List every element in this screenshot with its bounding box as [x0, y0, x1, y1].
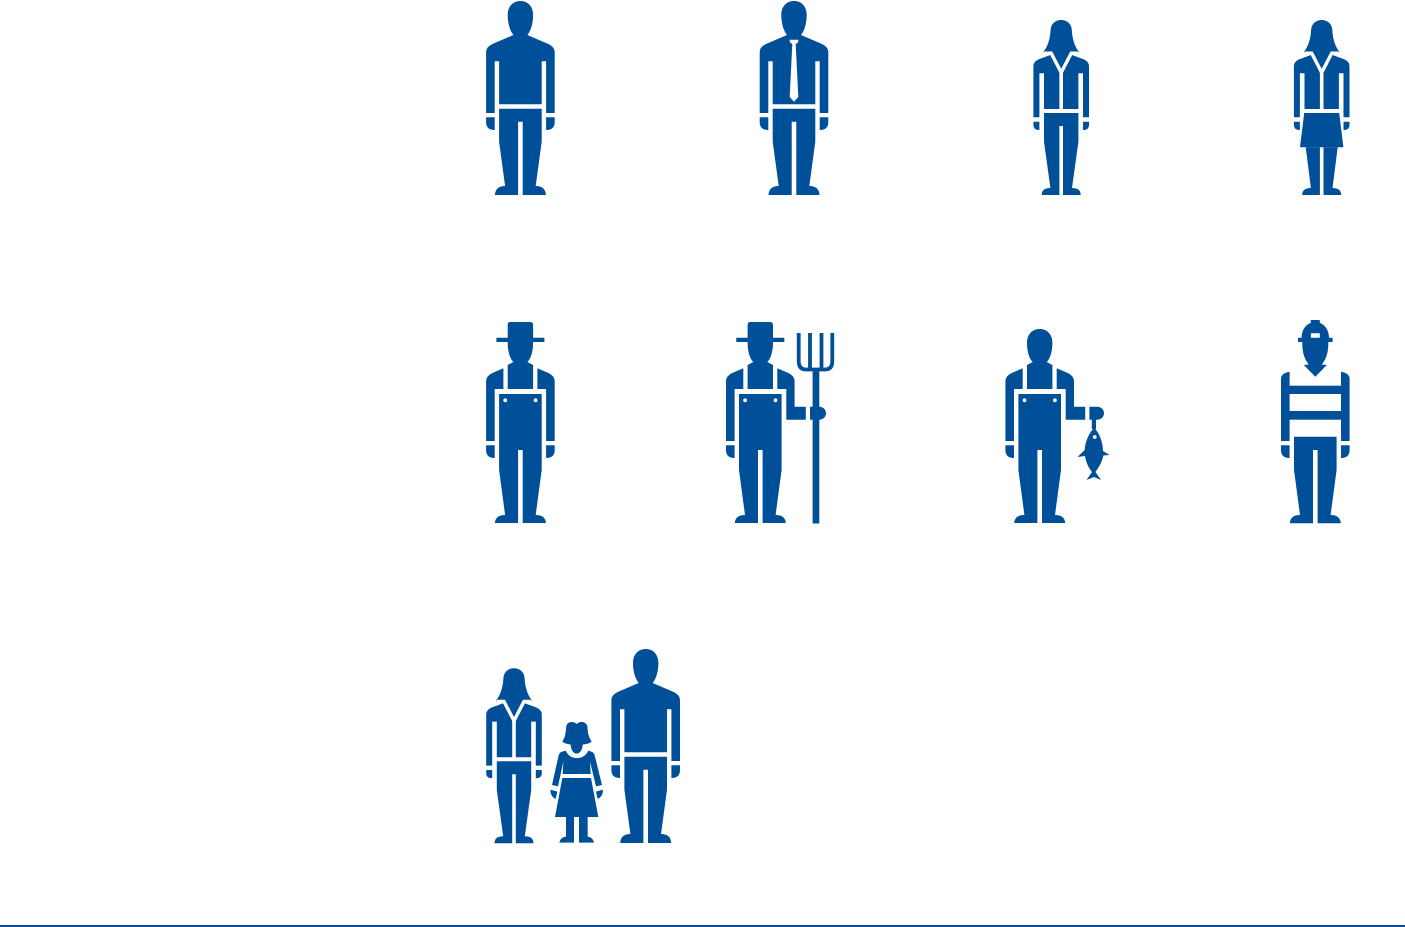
icon: farmer — [486, 322, 555, 523]
icon: man — [486, 1, 555, 195]
icon: mother — [486, 668, 542, 843]
icon: father — [611, 649, 680, 843]
icon: woman in skirt — [1294, 20, 1350, 195]
icon: family group — [486, 649, 680, 843]
bottom rule — [0, 925, 1405, 927]
icon: businessman with tie — [760, 1, 828, 195]
icon: child — [550, 722, 603, 843]
icon: woman in trousers — [1033, 20, 1089, 195]
icon: construction worker — [1281, 320, 1350, 523]
icon: farmer with pitchfork — [726, 322, 832, 524]
icon: fisherman holding fish — [1005, 329, 1110, 523]
